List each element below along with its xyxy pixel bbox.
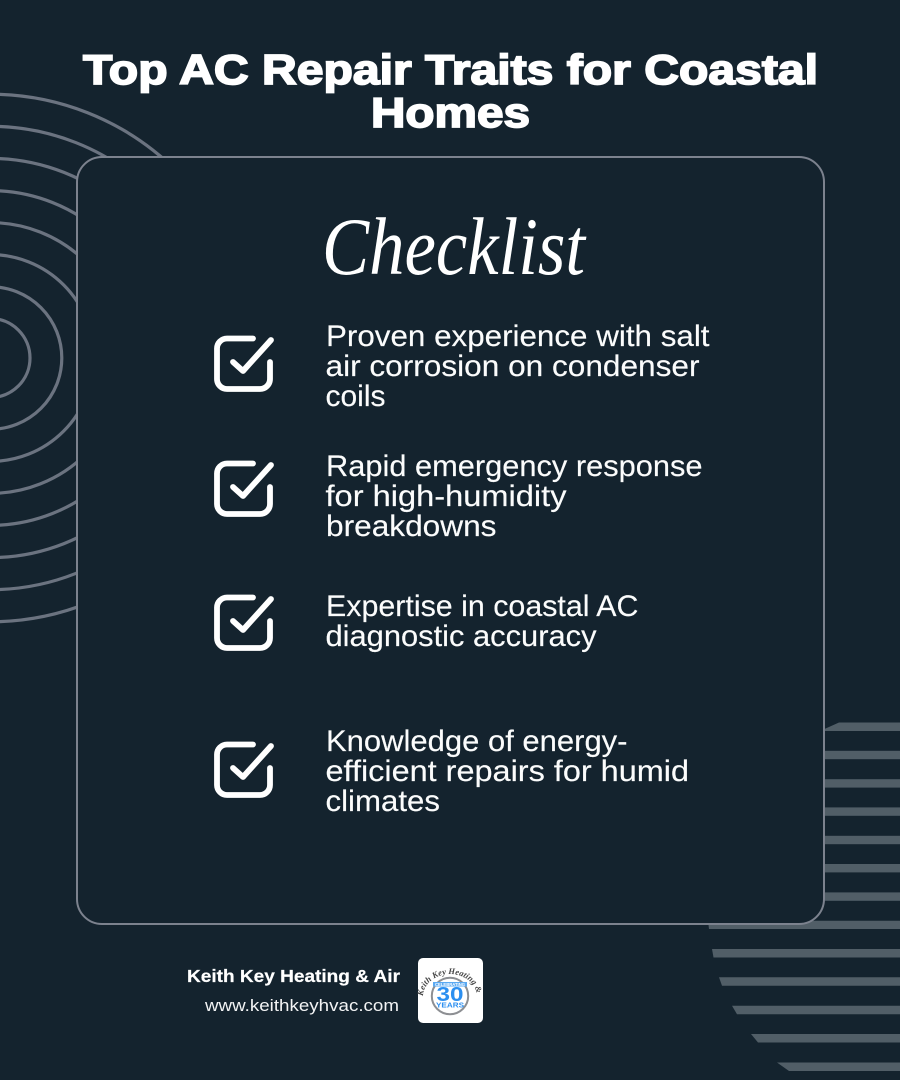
checklist item 3 <box>217 590 638 653</box>
panel: checklist card <box>77 157 824 924</box>
logo: 30 years badge: YEARS <box>436 1002 464 1010</box>
icon: checkbox 4 <box>217 744 271 795</box>
decorative striped circle <box>708 722 900 1071</box>
logo: 30 years badge: CELEBRATING <box>435 982 465 987</box>
text: item 1: Proven experience with salt <box>326 320 710 353</box>
heading: Checklist: Checklist <box>322 201 587 292</box>
text: item 4 <box>326 725 689 818</box>
checklist item 4 <box>217 725 689 818</box>
checklist item 1 <box>217 320 710 413</box>
text: item 2 <box>326 450 702 543</box>
icon: checkbox 2 <box>217 464 271 514</box>
title: Homes <box>371 89 530 136</box>
text: item 4: Knowledge of energy- <box>326 725 628 758</box>
text: item 4: climates <box>326 785 440 818</box>
title <box>83 46 818 136</box>
icon: checkbox 1 <box>217 338 271 389</box>
text: item 1: air corrosion on condenser <box>326 350 700 383</box>
text: item 2: Rapid emergency response <box>326 450 702 483</box>
logo: 30 years badge: 30 <box>436 984 464 1006</box>
title: Top AC Repair Traits for Coastal <box>83 46 818 93</box>
text: item 4: efficient repairs for humid <box>326 755 689 788</box>
text: item 2: for high-humidity <box>326 480 566 513</box>
text: item 3: Expertise in coastal AC <box>326 590 638 623</box>
decorative concentric arcs <box>0 94 254 622</box>
footer: website: www.keithkeyhvac.com <box>204 997 399 1015</box>
text: item 3 <box>326 590 638 653</box>
text: item 2: breakdowns <box>326 510 496 543</box>
text: item 1 <box>326 320 710 413</box>
text: item 3: diagnostic accuracy <box>326 620 596 653</box>
logo: 30 years badge: Keith Key Heating & <box>418 968 482 996</box>
checklist item 2 <box>217 450 702 543</box>
icon: checkbox 3 <box>217 598 271 648</box>
footer: company name: Keith Key Heating & Air <box>187 966 400 986</box>
text: item 1: coils <box>326 380 386 413</box>
logo: 30 years badge <box>418 958 483 1023</box>
